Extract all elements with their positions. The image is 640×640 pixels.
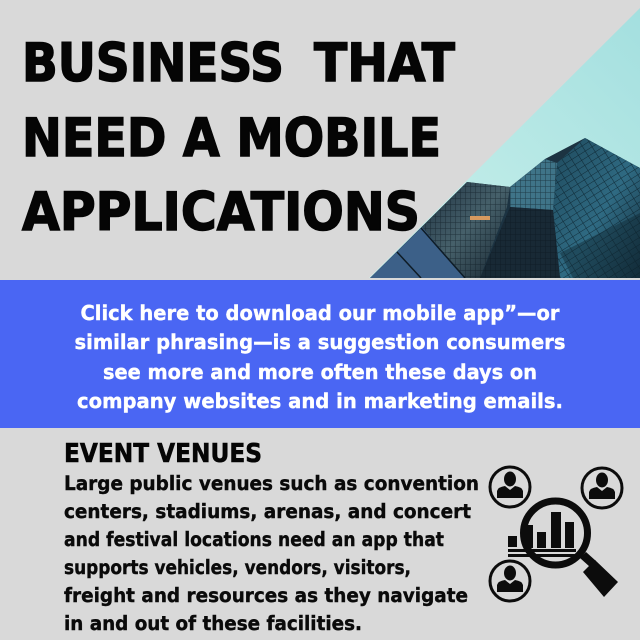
banner: blue panel with intro text: [0, 280, 640, 428]
body text: event venues: Large public venues such as convention: [64, 472, 479, 495]
photo: glass skyscrapers in a diagonal triangle: [360, 0, 640, 280]
heading: event venues: EVENT VENUES: [64, 439, 262, 469]
body text: event venues: centers, stadiums, arenas, and concert: [64, 500, 471, 523]
title: THAT: [314, 33, 455, 94]
title: [22, 33, 455, 243]
title: APPLICATIONS: [22, 182, 420, 243]
banner text: company websites and in marketing emails.: [77, 389, 563, 413]
icon: magnifying glass: [524, 501, 618, 597]
body text: event venues: supports vehicles, vendors, visitors,: [64, 556, 411, 579]
title: NEED A MOBILE: [22, 108, 441, 169]
title: BUSINESS: [22, 33, 284, 94]
icon: person top right: [582, 468, 622, 508]
icon: person bottom left: [490, 561, 530, 601]
banner text: see more and more often these days on: [103, 360, 537, 384]
body text: event venues: [64, 472, 479, 635]
body text: event venues: and festival locations need an app that: [64, 528, 444, 551]
banner text: Click here to download our mobile app”—or: [80, 301, 560, 325]
icon: person top left: [490, 467, 530, 507]
banner text: [74, 301, 566, 413]
icon: people and magnifying glass over bar chart: [490, 467, 622, 601]
icon: bar chart: [508, 512, 576, 557]
body text: event venues: freight and resources as they navigate: [64, 584, 468, 607]
body text: event venues: in and out of these facilities.: [64, 612, 362, 635]
banner text: similar phrasing—is a suggestion consumers: [74, 330, 566, 354]
